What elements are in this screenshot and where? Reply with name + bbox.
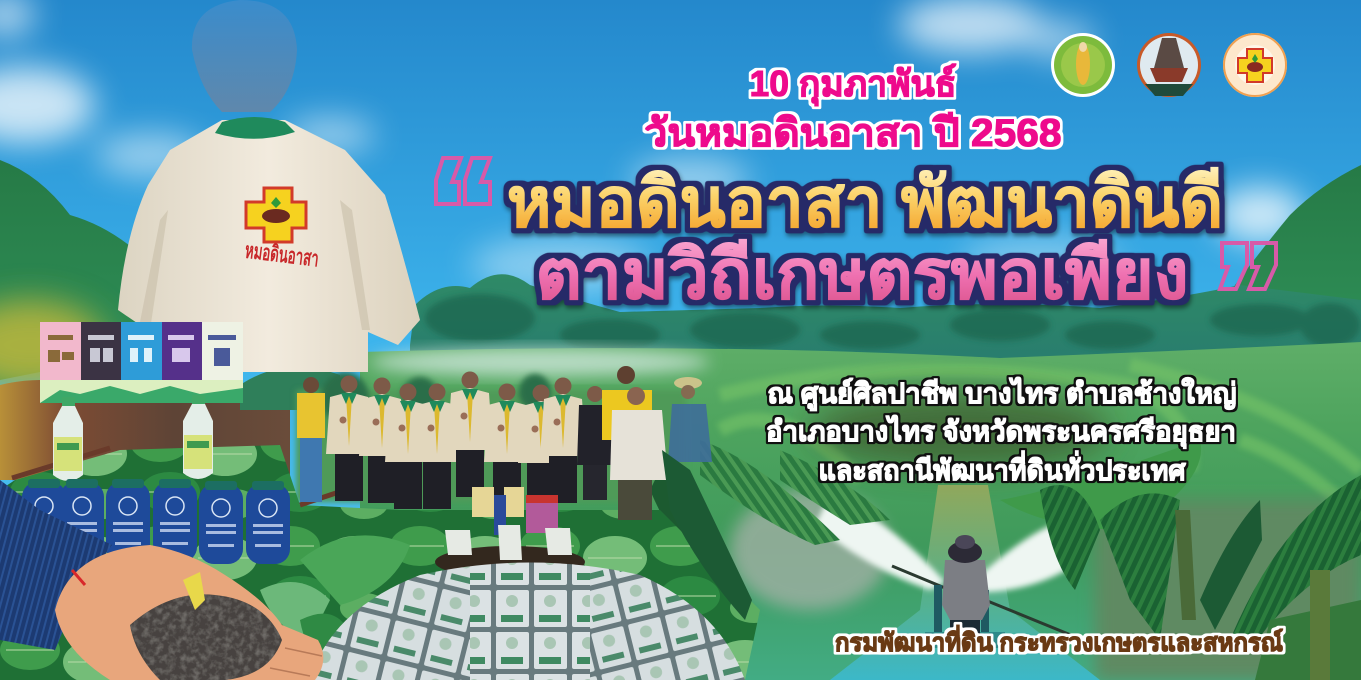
event location text: ณ ศูนย์ศิลปาชีพ บางไทร ตำบลช้างใหญ่	[768, 377, 1236, 411]
soil area	[0, 380, 290, 480]
blue barrels	[22, 479, 290, 564]
logo: land development department	[1051, 33, 1115, 97]
raised bed edge	[12, 448, 360, 505]
finger creases	[270, 648, 322, 676]
jacket person: head	[192, 0, 297, 112]
farmer on boat	[925, 535, 1005, 648]
clouds	[0, 0, 1305, 293]
volunteer in yellow shirt	[297, 377, 325, 502]
small hill behind group	[240, 367, 340, 410]
left mountain	[0, 160, 150, 380]
logos	[1051, 33, 1287, 97]
rice field	[360, 342, 1361, 680]
large cabbage leaves	[260, 535, 410, 665]
banana leaves left of the stream	[650, 440, 890, 620]
closing quote mark	[1220, 243, 1276, 289]
collar	[215, 117, 295, 139]
field terraces	[720, 365, 1361, 520]
main title line 2: ตามวิถีเกษตรพอเพียง	[536, 237, 1188, 313]
woman in yellow	[602, 366, 652, 440]
fertilizer bag mound	[315, 562, 745, 680]
trees behind group	[321, 372, 551, 424]
right mountain	[1210, 165, 1361, 350]
mist	[370, 348, 710, 376]
red wrist string	[72, 570, 85, 585]
spray backdrop	[730, 490, 890, 610]
signs display	[435, 487, 585, 578]
event location text	[766, 377, 1236, 486]
day name heading: วันหมอดินอาสา ปี 2568	[644, 112, 1062, 155]
banana leaves center	[1000, 440, 1201, 590]
woman in cream jacket	[610, 387, 668, 520]
hand holding soil	[55, 545, 323, 680]
infographic posters board	[40, 322, 243, 403]
date heading: 10 กุมภาพันธ์	[750, 63, 956, 107]
green background behind group	[296, 390, 686, 502]
jacket logo	[244, 188, 320, 271]
tree line	[410, 274, 1361, 380]
sleeve	[0, 480, 112, 650]
logo: soil doctor day	[1223, 33, 1287, 97]
volunteers group photo	[297, 366, 712, 520]
event location text: อำเภอบางไทร จังหวัดพระนครศรีอยุธยา	[766, 415, 1236, 449]
tree texture	[425, 294, 1360, 351]
bottles	[53, 395, 213, 481]
banana leaf overlapping group	[662, 450, 752, 620]
soil clump	[130, 594, 282, 680]
water spray left	[815, 495, 945, 590]
jacket folds	[140, 200, 370, 330]
logo: ministry of agriculture	[1137, 33, 1201, 97]
banana trees right	[1100, 475, 1361, 680]
opening quote mark	[436, 158, 490, 204]
grey backdrop under banana grove	[1095, 500, 1361, 680]
stream	[830, 485, 1100, 680]
haze behind details text	[810, 392, 1110, 468]
event location text: และสถานีพัฒนาที่ดินทั่วประเทศ	[818, 450, 1187, 486]
organisation footer: กรมพัฒนาที่ดิน กระทรวงเกษตรและสหกรณ์	[835, 625, 1283, 657]
sprout leaf	[183, 572, 205, 610]
jacket person: body	[118, 120, 420, 372]
woman in black jacket	[577, 386, 613, 500]
left haze field	[0, 300, 105, 390]
main title line 1: หมอดินอาสา พัฒนาดินดี	[507, 165, 1223, 241]
jacket logo: หมอดินอาสา	[244, 238, 320, 271]
cabbage field	[0, 445, 760, 680]
woman in denim jacket	[668, 377, 712, 462]
water spray right	[975, 518, 1082, 592]
irrigation pipes	[892, 566, 1088, 642]
